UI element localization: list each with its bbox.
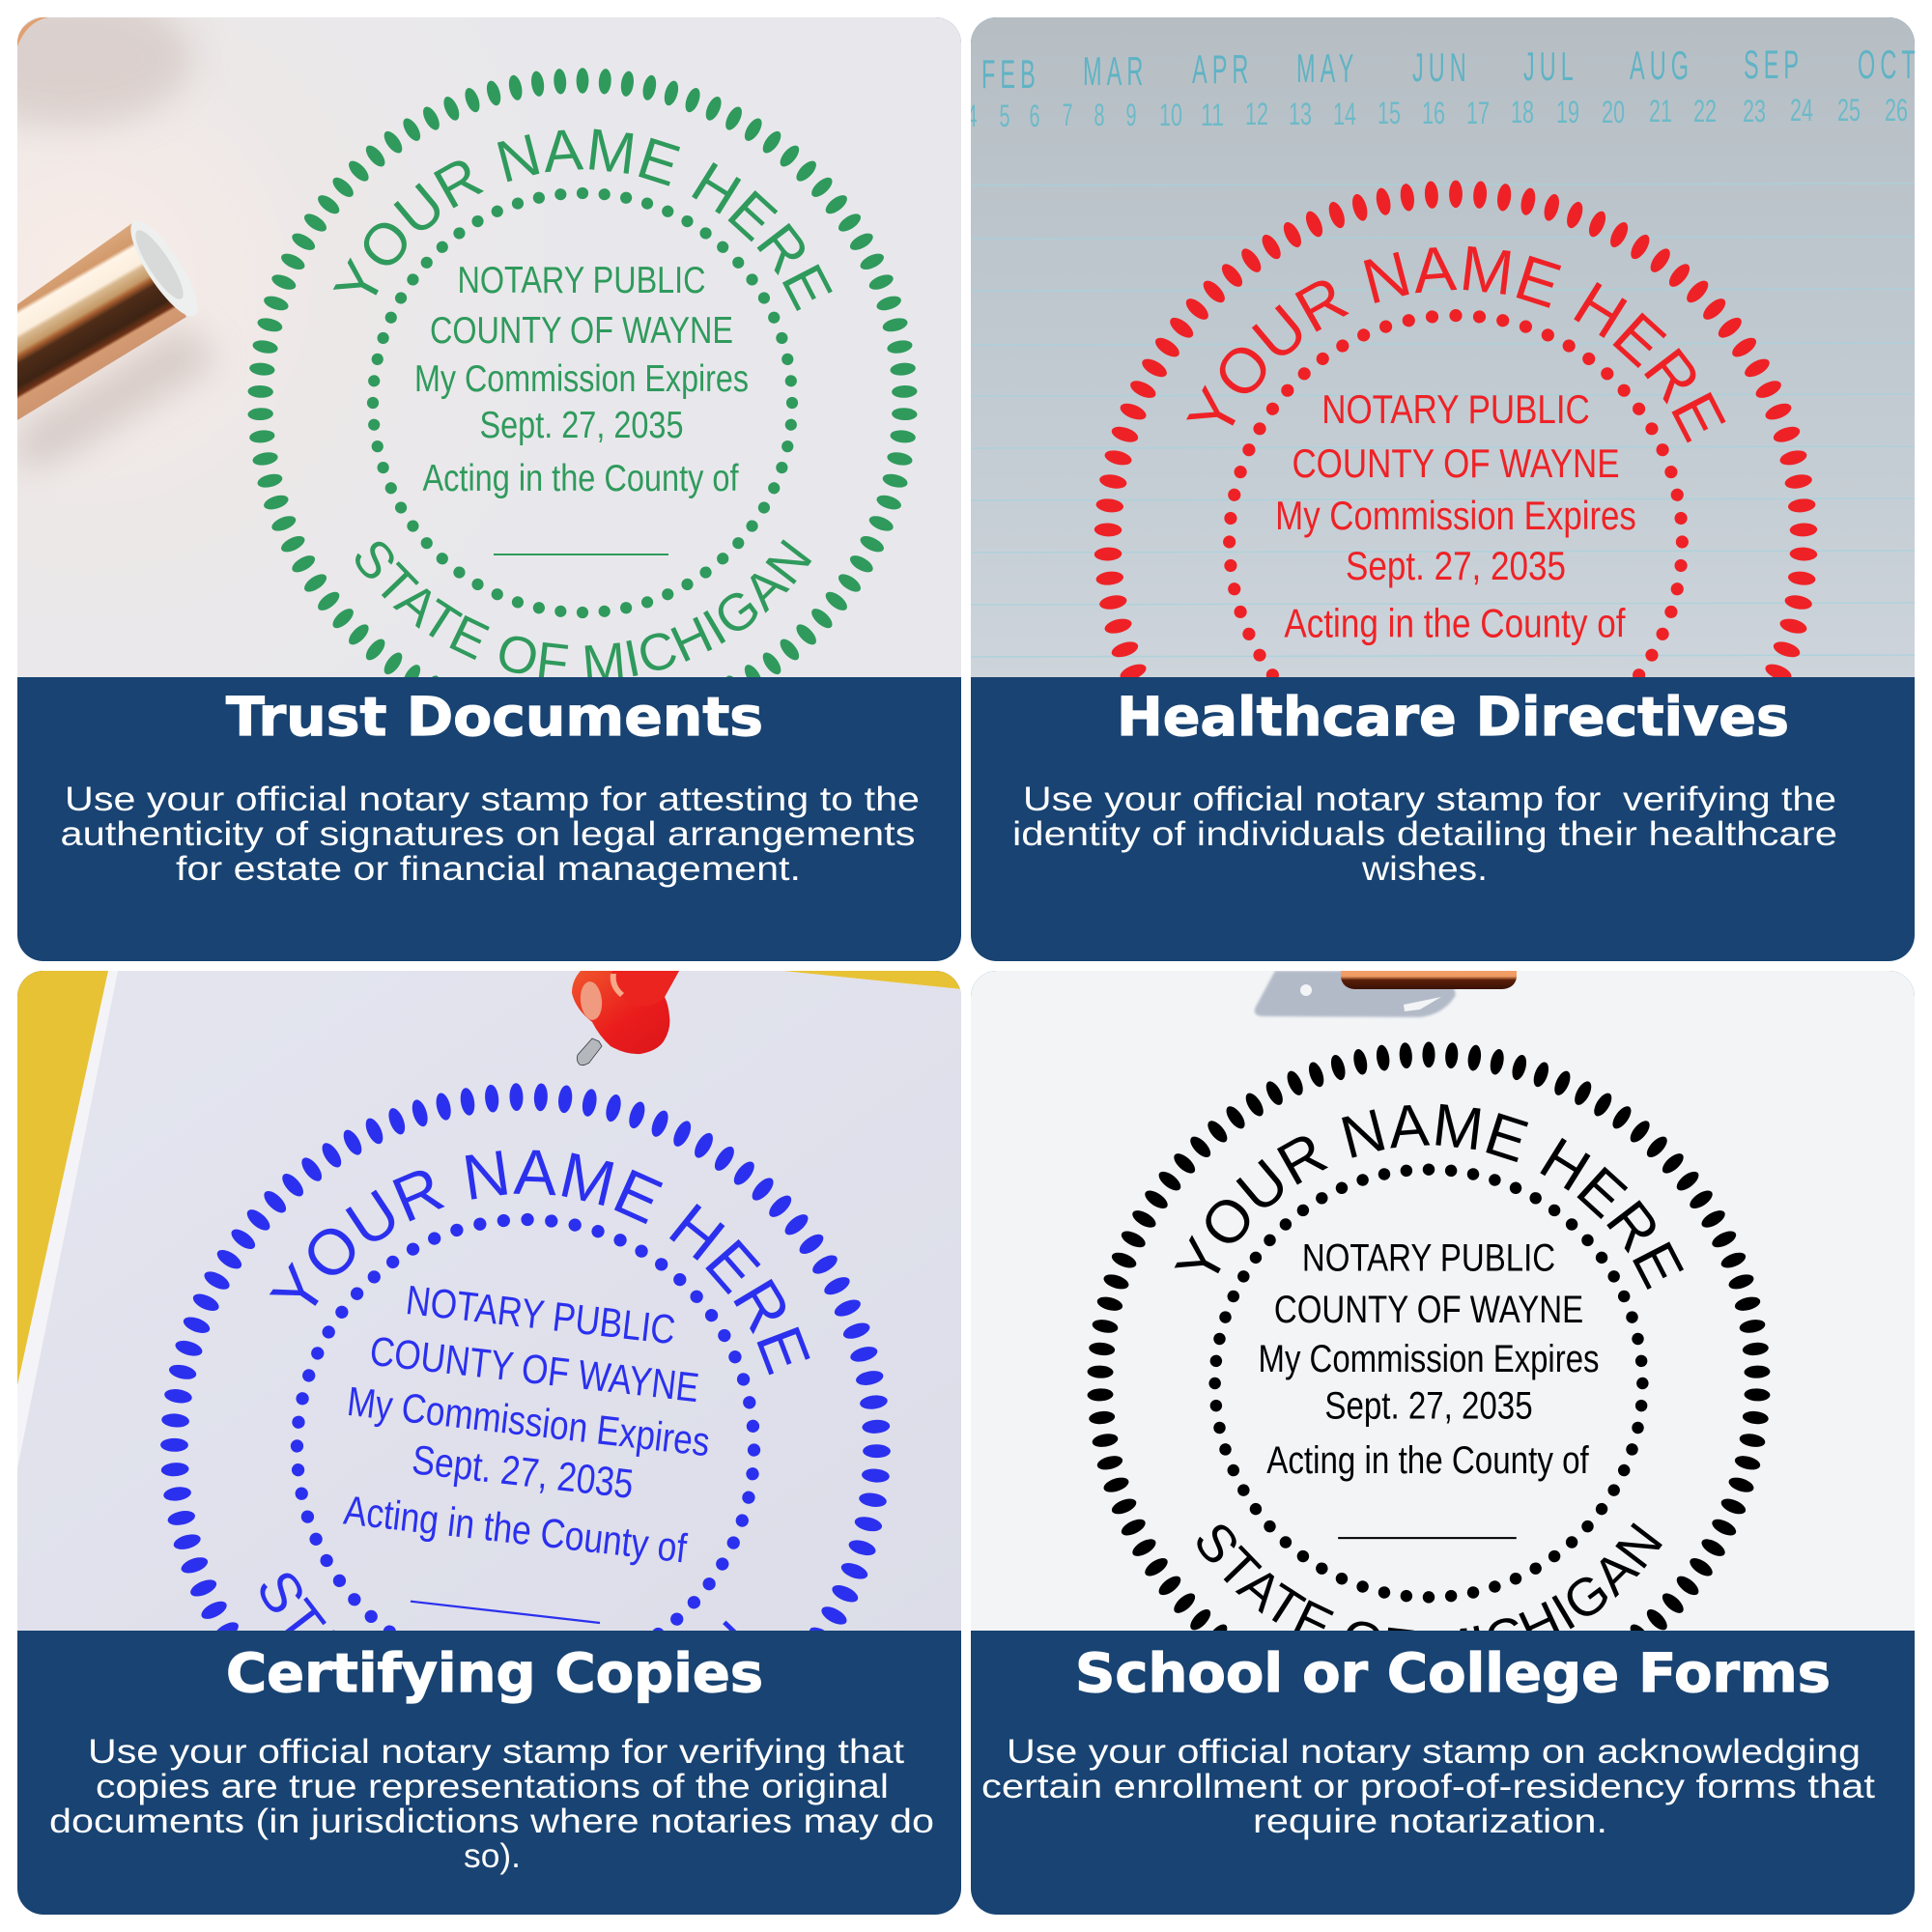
stamp: red notary seal: NOTARY PUBLIC (1321, 386, 1590, 432)
calendar day numbers: 16 (1422, 96, 1445, 130)
calendar day numbers: 17 (1466, 96, 1490, 130)
body text (981, 1733, 1875, 1840)
photo: black stamp on white paper (971, 971, 1915, 1631)
stamp: green notary seal: Sept. 27, 2035 (479, 405, 684, 446)
body text: Use your official notary stamp for attesting to the (65, 781, 920, 818)
body text: Use your official notary stamp on acknowledging (1007, 1733, 1861, 1771)
calendar day numbers (966, 93, 1908, 133)
photo: blue stamp on pinned paper over yellow (17, 971, 961, 1631)
caption: trust documents (60, 686, 920, 888)
body text: Use your official notary stamp for verifying the (1023, 781, 1836, 818)
heading: Healthcare Directives (1117, 686, 1789, 748)
heading: Certifying Copies (226, 1642, 763, 1704)
calendar months: JUL (1523, 44, 1578, 90)
calendar day numbers: 12 (1245, 97, 1268, 131)
calendar day numbers: 21 (1649, 94, 1672, 128)
body text: require notarization. (1253, 1803, 1607, 1840)
stamp: blue notary seal: NOTARY PUBLIC (404, 1278, 677, 1353)
panel: healthcare directives (971, 17, 1915, 961)
calendar day numbers: 8 (1094, 98, 1105, 132)
caption: healthcare directives (1012, 686, 1837, 888)
calendar months: FEB (981, 52, 1040, 98)
stamp: blue notary seal: Sept. 27, 2035 (410, 1437, 636, 1508)
stamp: green notary seal: YOUR NAME HERE (332, 129, 833, 311)
stamp: blue notary seal: Acting in the County of (341, 1488, 689, 1573)
icon: red push pin (572, 971, 679, 1065)
panel: trust documents (17, 17, 961, 961)
stamp: black notary seal: COUNTY OF WAYNE (1274, 1289, 1583, 1331)
caption: certifying copies (49, 1642, 934, 1875)
stamp: red notary seal: COUNTY OF WAYNE (1292, 440, 1620, 486)
body text (49, 1733, 934, 1875)
body text: certain enrollment or proof-of-residency forms that (981, 1768, 1875, 1805)
body text: identity of individuals detailing their healthcare (1012, 815, 1837, 853)
stamp: red notary seal (1094, 180, 1818, 677)
body text: documents (in jurisdictions where notaries may do (49, 1803, 934, 1840)
body text: so). (464, 1837, 521, 1875)
stamp: black notary seal (1088, 1041, 1770, 1631)
icon: stamp handle and shadow (1255, 971, 1517, 1017)
calendar day numbers: 5 (999, 99, 1010, 133)
body text (60, 781, 920, 888)
stamp: green notary seal: NOTARY PUBLIC (458, 260, 705, 301)
calendar day numbers: 22 (1693, 94, 1717, 128)
calendar months: MAR (1083, 49, 1148, 95)
calendar day numbers: 24 (1790, 93, 1813, 128)
calendar months: MAY (1296, 46, 1358, 92)
stamp: blue notary seal: COUNTY OF WAYNE (367, 1329, 701, 1411)
panel: school or college forms (971, 971, 1915, 1915)
stamp: black notary seal: Acting in the County of (1266, 1439, 1590, 1482)
calendar day numbers: 10 (1159, 98, 1182, 132)
calendar day numbers: 18 (1511, 95, 1534, 129)
calendar months (981, 43, 1920, 98)
calendar day numbers: 20 (1602, 95, 1625, 129)
body text: copies are true representations of the original (96, 1768, 889, 1805)
calendar months: APR (1192, 47, 1253, 93)
icon: copper pen (17, 213, 217, 473)
stamp: green notary seal: My Commission Expires (414, 358, 749, 400)
stamp: blue notary seal: My Commission Expires (345, 1379, 712, 1465)
body text: Use your official notary stamp for verifying that (88, 1733, 904, 1771)
heading: School or College Forms (1075, 1642, 1831, 1704)
stamp: blue notary seal (160, 1083, 891, 1631)
stamp: green notary seal: Acting in the County of (423, 458, 739, 499)
stamp: red notary seal: Acting in the County of (1284, 600, 1626, 645)
heading: Trust Documents (226, 686, 763, 748)
caption: school or college forms (981, 1642, 1875, 1840)
calendar day numbers: 15 (1378, 96, 1401, 130)
stamp: black notary seal: My Commission Expires (1259, 1338, 1599, 1380)
panel: certifying copies (17, 971, 961, 1915)
calendar day numbers: 7 (1063, 98, 1072, 132)
body text: authenticity of signatures on legal arrangements (60, 815, 916, 853)
stamp: red notary seal: YOUR NAME HERE (1186, 245, 1725, 442)
stamp: black notary seal: NOTARY PUBLIC (1302, 1237, 1555, 1280)
calendar day numbers: 14 (1333, 97, 1356, 131)
body text (1012, 781, 1837, 888)
photo: green stamp on paper with copper pen (17, 17, 961, 677)
body text: wishes. (1361, 850, 1488, 888)
calendar months: JUN (1412, 45, 1471, 91)
stamp: black notary seal: YOUR NAME HERE (1175, 1103, 1684, 1290)
stamp: blue notary seal: YOUR NAME HERE (269, 1150, 810, 1376)
calendar day numbers: 25 (1837, 93, 1861, 128)
calendar day numbers: 13 (1289, 97, 1312, 131)
calendar day numbers: 23 (1743, 94, 1766, 128)
calendar months: AUG (1630, 43, 1693, 89)
calendar day numbers: 6 (1030, 99, 1039, 133)
photo: red stamp on ruled calendar paper (971, 17, 1915, 677)
stamp: red notary seal: Sept. 27, 2035 (1346, 543, 1566, 588)
calendar day numbers: 19 (1556, 95, 1579, 129)
calendar day numbers: 9 (1126, 98, 1136, 132)
stamp: red notary seal: My Commission Expires (1275, 493, 1636, 538)
calendar day numbers: 11 (1201, 98, 1224, 132)
stamp: black notary seal: Sept. 27, 2035 (1324, 1385, 1533, 1428)
body text: for estate or financial management. (176, 850, 801, 888)
calendar months: SEP (1744, 43, 1804, 88)
stamp: green notary seal (247, 68, 918, 677)
stamp: green notary seal: COUNTY OF WAYNE (430, 310, 733, 352)
